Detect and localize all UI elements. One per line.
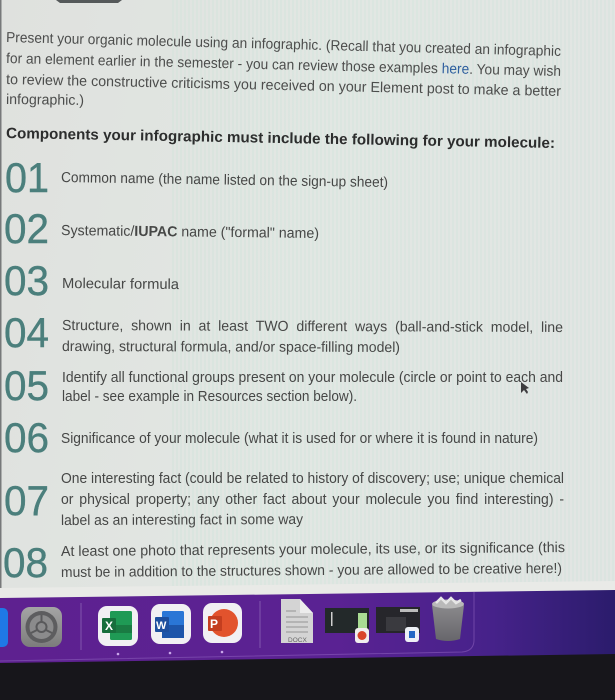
icon: powerpoint: P <box>210 617 218 631</box>
item 05: 05 <box>4 362 49 409</box>
item 07: label as an interesting fact in some way <box>61 512 304 529</box>
item 02 <box>4 205 319 252</box>
dock <box>0 590 615 663</box>
icon: mouse cursor <box>521 382 529 394</box>
icon: document thumbnail <box>376 607 420 642</box>
item 07 <box>4 471 564 529</box>
icon: docx file: DOCX <box>288 637 307 644</box>
intro paragraph: to review the constructive criticisms you received on your Element post to make a better <box>6 72 561 100</box>
item 01: 01 <box>5 154 49 201</box>
item 07: or physical property; any other fact about your molecule you find interesting) - <box>61 492 564 508</box>
item 07: 07 <box>4 477 49 524</box>
intro paragraph: Present your organic molecule using an infographic. (Recall that you created an infographic <box>6 30 561 60</box>
intro paragraph: infographic.) <box>6 92 84 109</box>
intro paragraph: for an element earlier in the semester - you can review those examples here. You may wish <box>6 51 561 80</box>
icon: docx file <box>281 599 313 644</box>
item 06 <box>4 414 538 461</box>
icon: powerpoint <box>203 603 242 643</box>
icon: system settings <box>21 607 62 647</box>
icon: trash can <box>432 598 464 641</box>
icon: presentation thumbnail <box>325 608 369 643</box>
screen bottom bezel <box>0 651 615 700</box>
dock running indicators <box>117 651 223 655</box>
item 05 <box>4 362 563 409</box>
icon: word <box>151 604 191 644</box>
item 04: drawing, structural formula, and/or space-filling model) <box>62 339 400 356</box>
item 08 <box>3 539 565 586</box>
item 06: Significance of your molecule (what it is used for or where it is found in nature) <box>61 431 538 447</box>
item 02: Systematic/IUPAC name ("formal" name) <box>61 223 319 242</box>
icon: excel: X <box>105 619 113 633</box>
item 08: 08 <box>3 539 48 586</box>
item 05: Identify all functional groups present on your molecule (circle or point to each and <box>62 370 563 386</box>
item 06: 06 <box>4 414 49 461</box>
heading: components: Components your infographic must include the following for your molecule: <box>6 125 555 152</box>
item 03 <box>4 257 180 304</box>
item 08: must be in addition to the structures shown - you are allowed to be creative here!) <box>61 561 562 581</box>
item 08: At least one photo that represents your molecule, its use, or its significance (this <box>61 540 565 560</box>
item 04 <box>4 309 563 356</box>
icon: finder fragment <box>0 608 8 647</box>
item 02: 02 <box>4 205 49 252</box>
item 04: 04 <box>4 309 49 356</box>
item 05: label - see example in Resources section below). <box>62 389 357 405</box>
item 04: Structure, shown in at least TWO different ways (ball-and-stick model, line <box>62 318 563 336</box>
intro paragraph <box>6 30 561 109</box>
item 03: Molecular formula <box>62 276 180 293</box>
item 03: 03 <box>4 257 49 304</box>
icon: word: W <box>156 620 167 632</box>
icon: excel <box>98 606 138 646</box>
item 01: Common name (the name listed on the sign-up sheet) <box>61 170 388 191</box>
item 01 <box>5 154 388 201</box>
item 07: One interesting fact (could be related to history of discovery; use; unique chemical <box>61 471 564 487</box>
